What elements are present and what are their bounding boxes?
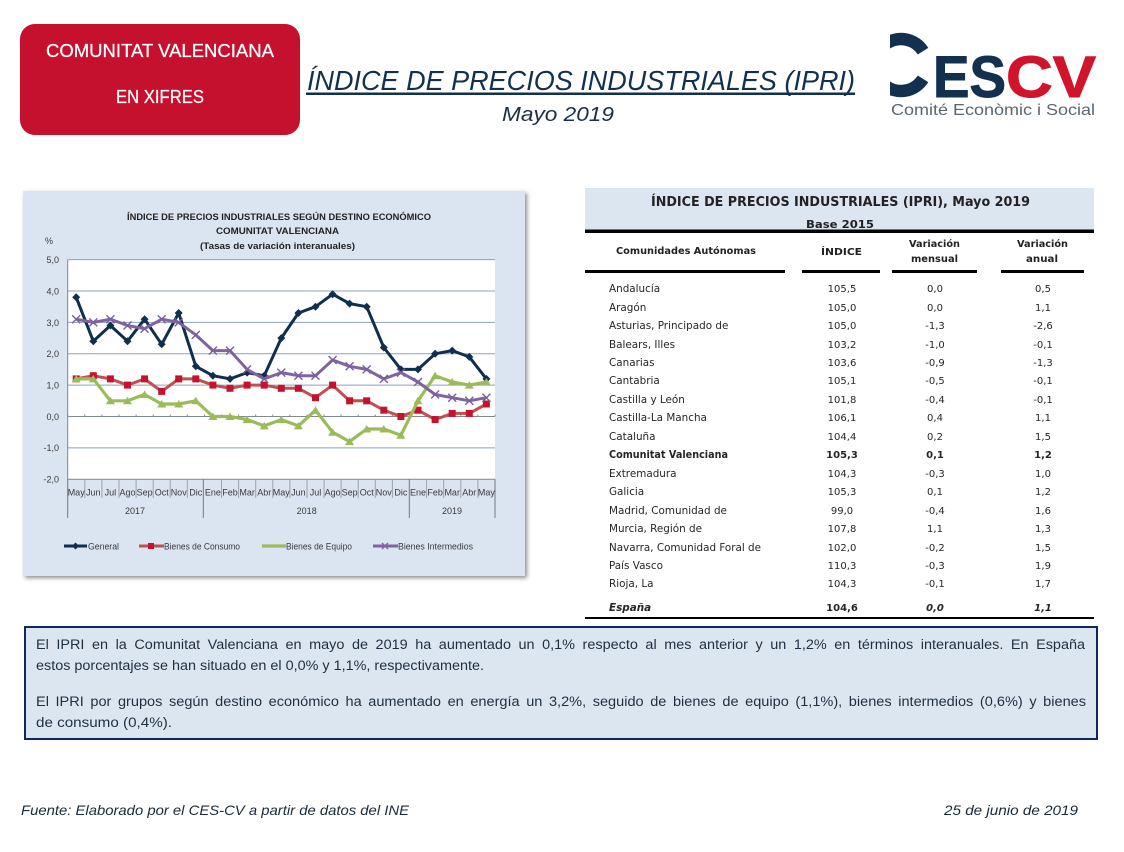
table rows: communities: -2,6 <box>1033 321 1053 332</box>
x axis month labels: Sep <box>342 488 358 498</box>
table rows: communities: 110,3 <box>828 561 856 572</box>
text box: summary: estos porcentajes se han situado en el 0,0% y 1,1%, respectivamente. <box>36 658 484 674</box>
x axis month labels: May <box>273 488 290 498</box>
y axis labels: 2,0 <box>46 349 59 359</box>
table rows: communities: Comunitat Valenciana <box>609 449 728 461</box>
series: Bienes de Equipo <box>76 376 486 442</box>
badge: Comunitat Valenciana en xifres: COMUNITAT VALENCIANA <box>46 40 275 61</box>
x axis month labels <box>68 488 495 498</box>
table rows: communities: -0,1 <box>1033 376 1053 387</box>
text box: summary: El IPRI en la Comunitat Valenciana en mayo de 2019 ha aumentado un 0,1% respecto al mes anterior y un 1,2% en términos interanuales. En España <box>36 637 1085 653</box>
footer: source: Fuente: Elaborado por el CES-CV a partir de datos del INE <box>21 802 410 818</box>
table rows: communities: -0,1 <box>1033 340 1053 351</box>
y axis labels: 5,0 <box>46 255 59 265</box>
logo: CES CV <box>875 39 1096 119</box>
table rows: communities: -0,4 <box>925 506 945 517</box>
table rows: communities: 1,2 <box>1034 450 1052 461</box>
table column headers: ÍNDICE <box>821 245 862 258</box>
x axis month labels: Abr <box>462 488 476 498</box>
x axis month labels: May <box>478 488 495 498</box>
x axis year labels <box>125 506 462 516</box>
table column headers: anual <box>1026 254 1058 265</box>
table rows: communities: País Vasco <box>609 560 663 572</box>
table rows: communities: 1,0 <box>1035 469 1051 480</box>
x axis month labels: Ene <box>410 488 426 498</box>
table rows: communities: 103,6 <box>828 358 856 369</box>
text box: summary: El IPRI por grupos según destino económico ha aumentado en energía un 3,2%, seguido de bienes de equipo (1,1%), bienes intermedios (0,6%) y bienes <box>36 694 1086 710</box>
table rows: communities: 105,0 <box>828 303 856 314</box>
table rows: communities: 102,0 <box>828 543 856 554</box>
table rows: communities: 103,2 <box>828 340 856 351</box>
table rows: communities: Aragón <box>609 302 646 314</box>
x axis month labels: Jun <box>291 488 306 498</box>
table rows: communities: Canarias <box>609 357 655 369</box>
panel: line chart <box>23 191 527 578</box>
title: ÍNDICE DE PRECIOS INDUSTRIALES (IPRI) <box>307 65 855 96</box>
table rows: communities: -0,9 <box>925 358 945 369</box>
x axis month labels: Oct <box>155 488 169 498</box>
x axis year labels: 2017 <box>125 506 145 516</box>
table rows: communities: -0,3 <box>925 469 945 480</box>
table column headers: mensual <box>911 254 958 265</box>
y axis labels: 4,0 <box>46 286 59 296</box>
table rows: communities: Castilla-La Mancha <box>609 412 707 424</box>
series: General <box>76 294 486 379</box>
series: Bienes Intermedios <box>76 319 486 401</box>
chart title <box>127 211 431 252</box>
panel: data table <box>585 188 1094 619</box>
legend: Bienes de Equipo <box>286 542 352 552</box>
table header band: Base 2015 <box>806 218 874 231</box>
text box: summary: de consumo (0,4%). <box>36 715 172 731</box>
badge: Comunitat Valenciana en xifres <box>20 24 300 135</box>
table rows: communities: 106,1 <box>828 413 856 424</box>
table rows: communities: 0,4 <box>927 413 943 424</box>
table column headers: Comunidades Autónomas <box>616 245 756 257</box>
table rows: communities: Asturias, Principado de <box>609 320 728 332</box>
table rows: communities: 1,1 <box>1035 303 1051 314</box>
y axis labels: 3,0 <box>46 318 59 328</box>
table row: España total: España <box>609 602 651 614</box>
x axis month labels: Mar <box>444 488 460 498</box>
x axis month labels: May <box>68 488 85 498</box>
table rows: communities: Navarra, Comunidad Foral de <box>609 542 761 554</box>
table rows: communities: 1,3 <box>1035 524 1051 535</box>
y axis labels: 0,0 <box>46 412 59 422</box>
table rows: communities: 1,5 <box>1035 543 1051 554</box>
x axis month labels: Dic <box>394 488 408 498</box>
table rows: communities: -1,0 <box>925 340 945 351</box>
table rows: communities: Madrid, Comunidad de <box>609 505 727 517</box>
x axis month labels: Jun <box>86 488 101 498</box>
table rows: communities: 104,3 <box>828 579 856 590</box>
table rows: communities: -0,1 <box>1033 395 1053 406</box>
logo: CES CV: Comité Econòmic i Social <box>891 102 1095 119</box>
chart title: COMUNITAT VALENCIANA <box>216 226 339 237</box>
y axis labels: 1,0 <box>46 380 59 390</box>
table column headers: Variación <box>1017 238 1068 250</box>
logo: CES CV: CV <box>1006 45 1096 110</box>
table rows: communities: Extremadura <box>609 468 677 480</box>
table header band <box>585 188 1094 233</box>
subtitle: date: Mayo 2019 <box>502 104 614 126</box>
table rows: communities: 1,9 <box>1035 561 1051 572</box>
table rows: communities: -0,3 <box>925 561 945 572</box>
table header band: ÍNDICE DE PRECIOS INDUSTRIALES (IPRI), Mayo 2019 <box>651 194 1030 210</box>
table rows: communities: -0,2 <box>925 543 945 554</box>
table rows: communities: 105,3 <box>826 450 858 461</box>
table rows: communities: 0,1 <box>926 450 944 461</box>
table rows: communities: 0,1 <box>927 487 943 498</box>
table rows: communities: 1,2 <box>1035 487 1051 498</box>
table rows: communities: 101,8 <box>828 395 856 406</box>
x axis month labels: Feb <box>427 488 443 498</box>
x axis month labels: Jul <box>310 488 321 498</box>
table row: España total: 0,0 <box>926 603 944 614</box>
x axis month labels: Abr <box>257 488 271 498</box>
x axis month labels: Ago <box>119 488 136 498</box>
y axis unit: % <box>45 236 53 246</box>
footer: date: 25 de junio de 2019 <box>943 802 1078 818</box>
x axis month labels: Ene <box>205 488 221 498</box>
table rows: communities: 1,6 <box>1035 506 1051 517</box>
table rows: communities: Andalucía <box>609 283 660 295</box>
table rows: communities: 104,3 <box>828 469 856 480</box>
y axis labels: -1,0 <box>43 443 59 453</box>
table rows: communities: Cataluña <box>609 431 656 443</box>
table rows: communities: 1,1 <box>1035 413 1051 424</box>
table rows: communities: 99,0 <box>831 506 853 517</box>
x axis month labels: Dic <box>189 488 203 498</box>
table rows: communities: Galicia <box>609 486 644 498</box>
table column headers <box>585 238 1084 272</box>
text box: summary <box>25 627 1097 739</box>
table rows: communities: -0,5 <box>925 376 945 387</box>
table rows: communities: 105,0 <box>828 321 856 332</box>
table row: España total <box>609 602 1052 614</box>
x axis month labels: Jul <box>105 488 116 498</box>
table rows: communities: 1,1 <box>927 524 943 535</box>
table rows: communities: 107,8 <box>828 524 856 535</box>
x axis month labels: Feb <box>222 488 238 498</box>
x axis year labels: 2019 <box>442 506 462 516</box>
table rows: communities: -1,3 <box>925 321 945 332</box>
x axis month labels: Mar <box>239 488 255 498</box>
table rows: communities: 0,0 <box>927 303 943 314</box>
gridlines and axes <box>68 260 495 518</box>
table rows: communities: Rioja, La <box>609 578 653 590</box>
table rows: communities: Cantabria <box>609 375 660 387</box>
table rows: communities: Murcia, Región de <box>609 523 702 535</box>
x axis month labels: Nov <box>376 488 392 498</box>
x axis month labels: Nov <box>171 488 187 498</box>
legend: Bienes Intermedios <box>398 542 473 552</box>
series: Bienes de Consumo <box>76 376 486 420</box>
legend <box>64 542 473 552</box>
legend: Bienes de Consumo <box>164 542 240 552</box>
x axis year labels: 2018 <box>297 506 317 516</box>
table rows: communities: 0,5 <box>1035 284 1051 295</box>
logo: CES CV: ES <box>933 45 1006 110</box>
table rows: communities: -0,1 <box>925 579 945 590</box>
badge: Comunitat Valenciana en xifres: EN XIFRES <box>116 86 204 107</box>
table row: España total: 1,1 <box>1034 603 1052 614</box>
x axis month labels: Oct <box>360 488 374 498</box>
table rows: communities: 1,7 <box>1035 579 1051 590</box>
y axis labels <box>43 255 59 484</box>
x axis month labels: Sep <box>137 488 153 498</box>
table rows: communities: -0,4 <box>925 395 945 406</box>
table rows: communities: -1,3 <box>1033 358 1053 369</box>
legend: General <box>88 542 119 552</box>
table rows: communities: 105,5 <box>828 284 856 295</box>
table rows: communities: Balears, Illes <box>609 339 675 351</box>
table row: España total: 104,6 <box>826 603 858 614</box>
y axis labels: -2,0 <box>43 474 59 484</box>
table rows: communities: 105,3 <box>828 487 856 498</box>
table rows: communities: 104,4 <box>828 432 856 443</box>
table rows: communities: Castilla y León <box>609 394 685 406</box>
table column headers: Variación <box>909 238 960 250</box>
chart title: (Tasas de variación interanuales) <box>200 241 355 252</box>
table rows: communities: 0,2 <box>927 432 943 443</box>
table rows: communities: 105,1 <box>828 376 856 387</box>
table rows: communities <box>609 283 1053 590</box>
chart title: ÍNDICE DE PRECIOS INDUSTRIALES SEGÚN DESTINO ECONÓMICO <box>127 211 431 223</box>
x axis month labels: Ago <box>325 488 341 498</box>
table rows: communities: 1,5 <box>1035 432 1051 443</box>
plot area <box>68 260 495 479</box>
table rows: communities: 0,0 <box>927 284 943 295</box>
